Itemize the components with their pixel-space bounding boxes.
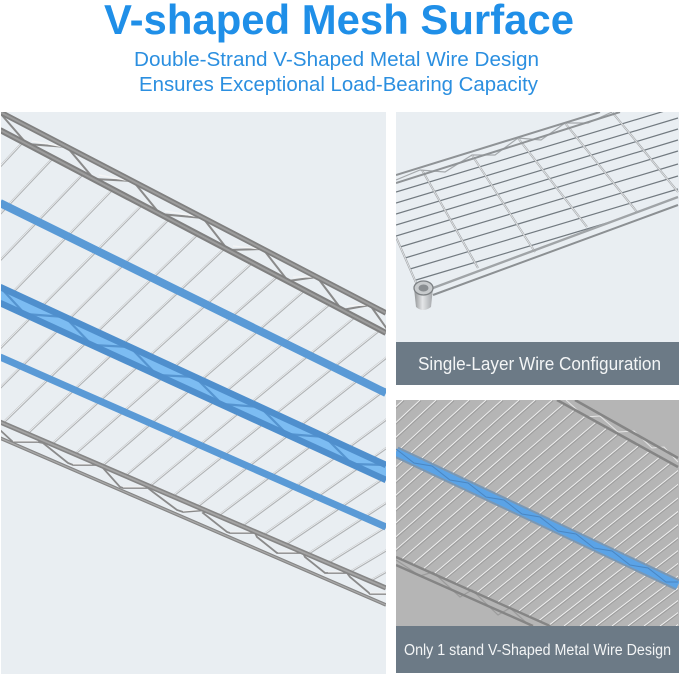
cross wires (1, 144, 386, 580)
bottom truss rail (396, 560, 530, 626)
front rail (433, 197, 678, 288)
label bar: single-layer: Single-Layer Wire Configuration (418, 354, 661, 374)
back truss rail (396, 112, 612, 180)
label bar: single-strand (396, 626, 679, 673)
shelf corner post (414, 281, 433, 310)
subtitle: Ensures Exceptional Load-Bearing Capacity (139, 74, 538, 96)
longitudinal wires (396, 107, 678, 280)
bottom truss rail (0, 422, 386, 605)
panel: single-strand close-up (396, 400, 679, 626)
blue highlighted wire 1 (0, 203, 386, 393)
panel: double-strand close-up (1, 112, 386, 674)
blue V-shaped wire (396, 452, 678, 585)
top truss rail (0, 112, 392, 336)
cross wires (396, 400, 679, 626)
label bar: single-layer (396, 342, 679, 385)
panel: single-layer shelf (396, 107, 679, 342)
blue highlighted V-shaped truss (0, 287, 386, 480)
subtitle (134, 49, 539, 96)
blue highlighted wire 2 (0, 357, 386, 527)
cross wires (396, 112, 678, 285)
shelf wire frame (396, 107, 678, 295)
top truss rail (566, 400, 678, 462)
subtitle: Double-Strand V-Shaped Metal Wire Design (134, 49, 539, 71)
